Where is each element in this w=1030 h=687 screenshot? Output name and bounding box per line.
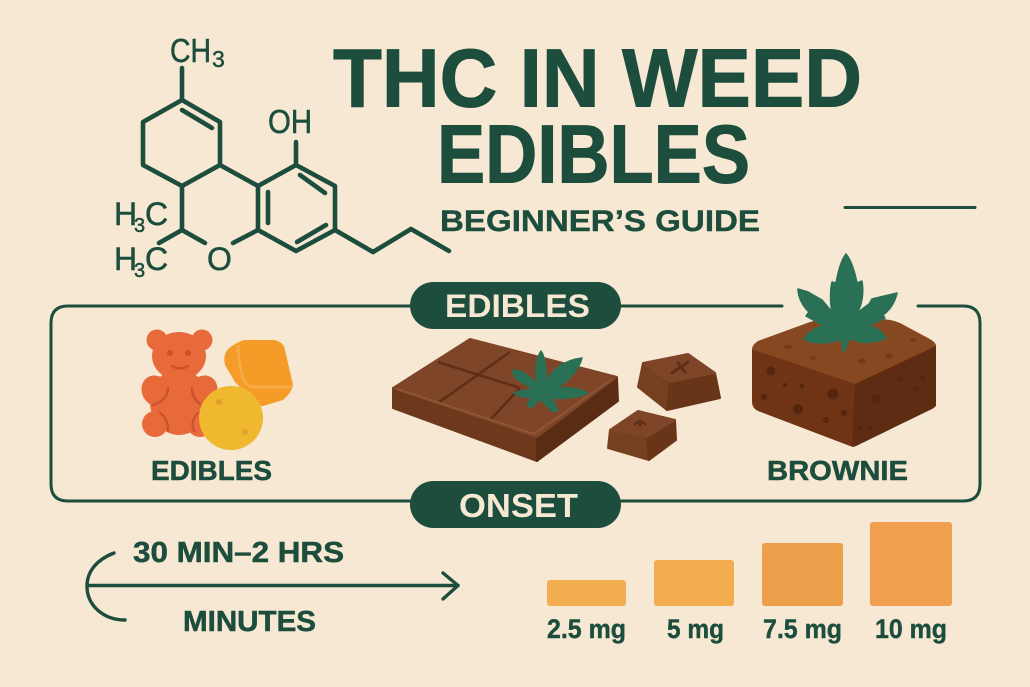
icon: THC molecule diagram: O bbox=[207, 241, 232, 277]
heading pill: onset bbox=[410, 481, 621, 528]
icon: chocolate bar with leaf bbox=[393, 339, 618, 461]
title: THC IN WEED bbox=[333, 32, 862, 124]
heading pill: onset: ONSET bbox=[459, 487, 578, 524]
icon: THC molecule diagram: H bbox=[114, 241, 137, 277]
label: brownie: BROWNIE bbox=[767, 455, 908, 486]
title bbox=[333, 32, 862, 200]
bar: 7.5 mg: 7.5 mg bbox=[763, 614, 842, 644]
subtitle: BEGINNER’S GUIDE bbox=[440, 205, 760, 238]
bar: 10 mg: 10 mg bbox=[875, 614, 947, 644]
icon: THC molecule diagram: CH bbox=[170, 32, 211, 69]
icon: orange gummy cube bbox=[224, 340, 293, 406]
icon: THC molecule diagram: C bbox=[145, 241, 168, 277]
icon: cannabis leaf on brownie bbox=[798, 254, 897, 351]
bar: 2.5 mg: 2.5 mg bbox=[547, 614, 626, 644]
icon: THC molecule diagram: 3 bbox=[212, 46, 225, 72]
label: edibles: EDIBLES bbox=[151, 455, 272, 486]
text: minutes: MINUTES bbox=[183, 606, 316, 638]
heading pill: edibles: EDIBLES bbox=[445, 288, 590, 324]
panel: edibles frame bbox=[51, 306, 980, 501]
text: onset range: 30 MIN–2 HRS bbox=[133, 537, 344, 569]
icon: THC molecule diagram bbox=[114, 32, 449, 282]
bar: 5 mg: 5 mg bbox=[667, 614, 724, 644]
icon: gummy bear bbox=[136, 330, 223, 437]
icon: THC molecule diagram: C bbox=[145, 196, 168, 232]
icon: THC molecule diagram: 3 bbox=[134, 260, 145, 282]
icon: THC molecule diagram: H bbox=[114, 196, 137, 232]
icon: chocolate piece large bbox=[638, 354, 720, 410]
icon: cannabis leaf on chocolate bbox=[513, 351, 588, 411]
icon: chocolate piece small bbox=[608, 411, 676, 460]
icon: brownie with leaf bbox=[752, 254, 936, 447]
icon: yellow gummy ball bbox=[199, 386, 263, 450]
title: EDIBLES bbox=[437, 108, 750, 200]
bar: 5 mg bbox=[654, 560, 734, 644]
icon: THC molecule diagram: OH bbox=[268, 103, 312, 140]
icon: THC molecule diagram: 3 bbox=[134, 215, 145, 237]
chart: dose bars bbox=[547, 522, 952, 644]
bar: 2.5 mg bbox=[547, 580, 626, 644]
bar: 10 mg bbox=[870, 522, 952, 644]
heading pill: edibles bbox=[410, 282, 621, 329]
icon: gummy candies bbox=[136, 330, 293, 450]
bar: 7.5 mg bbox=[762, 543, 843, 644]
accent rule bbox=[845, 206, 975, 209]
arrow: onset timeline bbox=[87, 553, 458, 620]
